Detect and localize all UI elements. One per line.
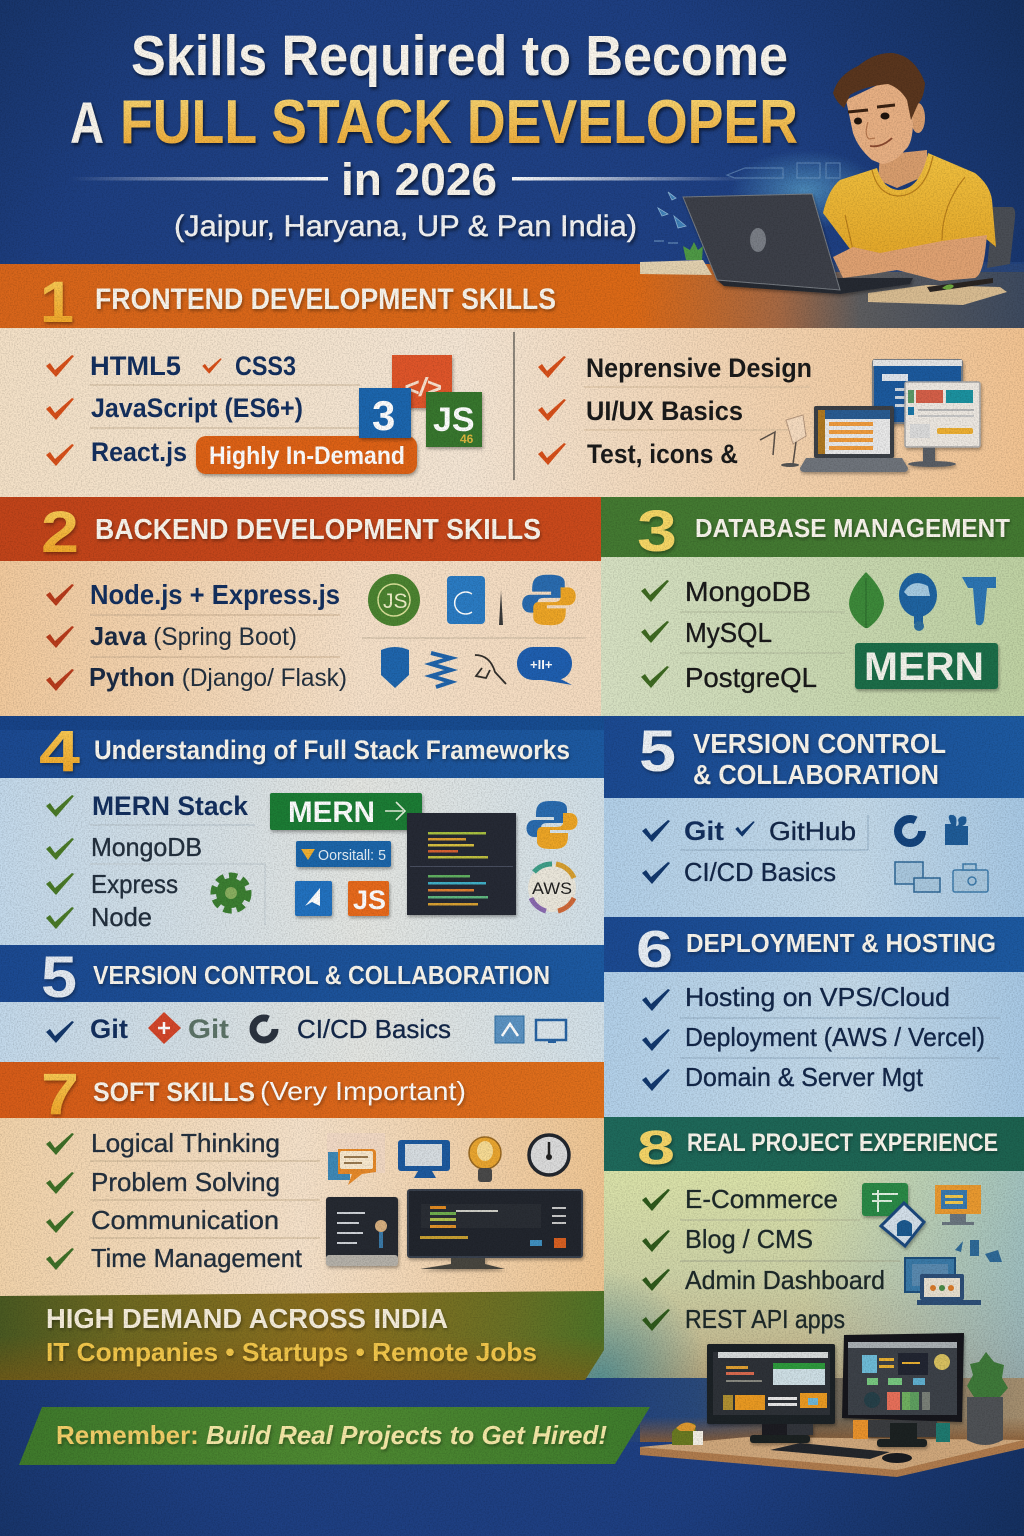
panel: database management: [601, 497, 1024, 716]
high demand bottom warm shade: [0, 1291, 604, 1380]
panel 8 body: [585, 1171, 1024, 1378]
item: postgresql: PostgreQL: [685, 662, 817, 693]
icon: shield: [381, 647, 409, 688]
item: blog: Blog / CMS: [685, 1224, 813, 1254]
item: rest api: REST API apps: [685, 1304, 845, 1334]
lower backdrop strip: [570, 1378, 1024, 1442]
title highlight: FULL STACK DEVELOPER: [120, 88, 798, 157]
panel 1 number: 1: [40, 270, 74, 335]
plant: [967, 1352, 1008, 1445]
panel 4 heading: Understanding of Full Stack Frameworks: [94, 735, 570, 765]
icon: feather: [475, 655, 506, 684]
illustration: white monitor: [905, 382, 980, 467]
item: ui/ux basics: UI/UX Basics: [586, 396, 743, 426]
small desk pot: [672, 1422, 703, 1445]
subtitle: (Jaipur, Haryana, UP & Pan India): [174, 210, 637, 243]
icon: green sheet: [862, 1183, 908, 1216]
panel 6 heading: DEPLOYMENT & HOSTING: [686, 928, 996, 958]
icon: css tile: [359, 388, 411, 439]
panel 2 body: [0, 561, 601, 716]
keyboard: [770, 1443, 890, 1459]
panel 3 header band: [601, 497, 1024, 557]
panel 5 right heading: VERSION CONTROL: [693, 728, 946, 759]
icon: server: [895, 862, 940, 892]
right monitor: [842, 1333, 964, 1447]
icon: needle: [499, 590, 503, 625]
icon: green flower: [214, 876, 248, 910]
item: problem solving: Problem Solving: [91, 1167, 280, 1197]
icon: clock: [529, 1135, 569, 1175]
ear: [911, 103, 925, 133]
code screen: [407, 813, 516, 915]
icon: ring: [253, 1018, 275, 1040]
panel 7 heading: SOFT SKILLS: [93, 1077, 255, 1107]
badge: install: [296, 841, 391, 867]
panel: deployment and hosting: [604, 917, 1024, 1117]
panel: version control and collaboration (right): [604, 716, 1024, 917]
title line 1: Skills Required to Become: [131, 24, 788, 88]
eyes and smile: [848, 105, 895, 146]
badge: mern arrow: [270, 793, 422, 830]
icon: speech bubble: [517, 647, 572, 685]
title letter A: A: [70, 91, 104, 156]
icon: chat: [327, 1133, 385, 1185]
hair: [833, 53, 925, 120]
icon: js tile: JS: [433, 401, 475, 439]
item: node and express: Node.js + Express.js: [90, 579, 340, 610]
badge: highly in-demand: Highly In-Demand: [209, 442, 405, 470]
book on desk: [868, 285, 1007, 305]
faint tech outlines: [727, 163, 840, 178]
panel 7 heading: (Very Important): [260, 1076, 466, 1106]
callout: remember banner: [19, 1407, 650, 1465]
panel 1 heading: FRONTEND DEVELOPMENT SKILLS: [95, 283, 556, 316]
item: mongodb: [46, 832, 202, 862]
item: express: Express: [91, 869, 178, 899]
item: hosting: Hosting on VPS/Cloud: [685, 982, 950, 1012]
icon: python: [526, 801, 578, 849]
panel 3 heading: DATABASE MANAGEMENT: [695, 513, 1010, 543]
banner text: Remember: Build Real Projects to Get Hired!: [56, 1420, 607, 1450]
face: [846, 80, 913, 164]
panel 5 right header band: [604, 716, 1024, 798]
item: admin dashboard: Admin Dashboard: [685, 1265, 885, 1295]
device: tablet: [326, 1197, 398, 1266]
t-shirt: [823, 153, 996, 253]
label: ci/cd basics: CI/CD Basics: [297, 1014, 451, 1044]
high demand heading: HIGH DEMAND ACROSS INDIA: [46, 1303, 448, 1334]
panel 2 header band: [0, 497, 601, 561]
icon: js tile: [348, 881, 389, 916]
panel 6 header band: [604, 917, 1024, 972]
arm and hand: [833, 235, 987, 281]
item: deployment: Deployment (AWS / Vercel): [685, 1022, 985, 1052]
bottom desk illustration: [640, 1333, 1024, 1477]
panel 8 lower-left teal fade: [585, 1270, 720, 1378]
high demand background: [0, 1291, 604, 1380]
icon: briefcase: [953, 864, 988, 892]
panel 2 number: 2: [41, 500, 79, 565]
item: mongodb: MongoDB: [685, 576, 811, 607]
lower backdrop brown streak: [640, 1400, 1024, 1442]
icon: small cloud marks: [955, 1240, 1002, 1262]
banner shape: [19, 1407, 650, 1465]
icon: postgres: [962, 577, 996, 625]
badge: mern arrow: MERN: [288, 796, 375, 829]
illustration: laptop: [800, 406, 908, 472]
panel 5 left body: [0, 1002, 604, 1062]
icon: laptop: [917, 1274, 981, 1305]
item: mongodb: MongoDB: [91, 832, 202, 862]
panel 6 number: 6: [636, 921, 673, 979]
panel 3 body: [601, 557, 1024, 716]
panel 2 heading: BACKEND DEVELOPMENT SKILLS: [95, 514, 541, 546]
laptop: [683, 194, 913, 294]
item: git: Git: [90, 1014, 128, 1044]
left monitor: [707, 1344, 835, 1443]
icon: blue tile: [295, 881, 332, 916]
icon: html tile: </>: [404, 372, 442, 402]
panel 1 body: [0, 328, 1024, 497]
desk top: [640, 1437, 1024, 1470]
item: node: [46, 902, 152, 932]
panel 6 body: [604, 972, 1024, 1117]
item: express: [46, 869, 178, 899]
icon: git ring: [898, 819, 922, 843]
icon: aws: AWS: [532, 879, 572, 898]
icon: cloud tile: [495, 1016, 524, 1043]
hero illustration: developer at laptop: [640, 53, 1015, 305]
item: HTML5 and CSS3: HTML5: [90, 351, 181, 381]
icon: monitor: [398, 1140, 450, 1178]
item: git and github: Git: [684, 816, 724, 846]
item: responsive design: Neprensive Design: [586, 353, 812, 383]
desk front edge: [640, 1440, 1024, 1477]
badge: install: Oorsitall: 5: [318, 847, 386, 864]
icon: speech bubble: +II+: [530, 657, 553, 672]
title block: [70, 24, 798, 243]
panel 7 number: 7: [41, 1062, 79, 1127]
icon: mysql dolphin: [899, 573, 937, 631]
glow behind developer: [730, 150, 880, 230]
panel 8 number: 8: [637, 1122, 675, 1175]
icon: orange monitor: [935, 1185, 981, 1225]
icon: git diamond: [148, 1012, 181, 1044]
icon: aws: [528, 864, 576, 912]
panel 3 number: 3: [637, 499, 677, 564]
icon: js tile: JS: [353, 885, 386, 915]
panel: soft skills: [0, 1062, 604, 1296]
icon: js tile: [426, 392, 482, 447]
item: React.js: [46, 437, 187, 467]
item: git and github: [642, 816, 856, 846]
item: python: Python (Django/ Flask): [89, 662, 347, 692]
panel 5 right heading: [693, 728, 946, 790]
item: HTML5 and CSS3: CSS3: [235, 351, 296, 381]
item: logical thinking: Logical Thinking: [91, 1128, 280, 1158]
label: git: Git: [188, 1014, 229, 1044]
title year: in 2026: [341, 154, 497, 205]
item: git and github: GitHub: [769, 816, 856, 846]
panel: version control and collaboration (left): [0, 945, 604, 1062]
icon: node circle: JS: [383, 590, 408, 613]
icon: lamp: [760, 415, 806, 467]
item: node: Node: [91, 902, 152, 932]
item: mysql: MySQL: [685, 617, 772, 648]
icon: mongodb leaf: [849, 572, 884, 628]
collar and sleeve shading: [845, 156, 965, 250]
panel 8 header band: [604, 1117, 1024, 1171]
item: time management: Time Management: [91, 1243, 303, 1273]
item: domain: Domain & Server Mgt: [685, 1062, 924, 1092]
icon: js tile: 46: [460, 432, 474, 446]
icon: css tile: 3: [372, 392, 395, 439]
panel 4 header band: [0, 716, 604, 778]
panel: real project experience: [570, 1117, 1024, 1442]
panel 8 right tint: [585, 1171, 1024, 1378]
panel 5 left header band: [0, 945, 604, 1002]
panel 7 heading: [93, 1076, 466, 1107]
icon: node circle: [368, 574, 420, 626]
panel 5 left number: 5: [41, 945, 77, 1010]
orange and green tags: [853, 1420, 950, 1442]
panel 4 body: [0, 778, 604, 945]
high demand locations: IT Companies • Startups • Remote Jobs: [46, 1337, 537, 1367]
icon: dashboard screen: [905, 1258, 955, 1292]
item: mysql: [641, 617, 772, 648]
panel 5 right body: [604, 798, 1024, 917]
item: ci/cd basics: CI/CD Basics: [684, 857, 836, 887]
panel 4 header top strip: [0, 716, 604, 730]
panel 1 band top, blue at the right behind the developer: [740, 262, 1024, 272]
item: communication: Communication: [91, 1205, 279, 1235]
panel 1 header band: [0, 264, 1024, 328]
floating marks: [654, 192, 686, 243]
item: JavaScript: JavaScript (ES6+): [91, 393, 303, 423]
icon: light bulb: [469, 1137, 501, 1182]
icon: python: [522, 575, 576, 625]
badge: mern: MERN: [864, 645, 984, 689]
panel 4 number: 4: [39, 719, 80, 784]
neck: [878, 150, 927, 188]
panel: backend development skills: [0, 497, 601, 716]
panel: high demand across india: [0, 1291, 604, 1380]
icon: html tile: [392, 355, 452, 408]
panel 5 left heading: VERSION CONTROL & COLLABORATION: [93, 960, 550, 990]
leaf on pen: [942, 284, 954, 290]
item: test, icons: Test, icons &: [587, 439, 738, 469]
pen: [927, 278, 993, 292]
item: git: [46, 1014, 128, 1044]
chair: [987, 207, 1015, 268]
mouse: [882, 1453, 912, 1463]
icon: spring: [431, 653, 451, 687]
icon: monitor: [536, 1020, 566, 1043]
panel 7 header band: [0, 1062, 604, 1118]
icon: shield: [881, 1203, 924, 1246]
badge: highly in-demand: [196, 436, 417, 474]
desk box with plant: [640, 242, 712, 275]
panel 5 right heading: & COLLABORATION: [693, 759, 939, 790]
device: wide monitor: [408, 1190, 582, 1269]
item: mern stack: MERN Stack: [92, 791, 249, 821]
panel: understanding of full stack frameworks: [0, 716, 604, 945]
icon: blue tile: [447, 576, 485, 624]
panel 5 right number: 5: [639, 719, 676, 784]
icon: collaborators: [945, 815, 968, 845]
item: HTML5 and CSS3: [46, 351, 296, 381]
item: React.js: React.js: [91, 437, 187, 467]
illustration: blue monitor: [873, 360, 962, 423]
panel: frontend development skills: [0, 262, 1024, 497]
item: e-commerce: E-Commerce: [685, 1184, 838, 1214]
item: java: Java (Spring Boot): [90, 621, 297, 651]
panel 7 body: [0, 1118, 604, 1296]
